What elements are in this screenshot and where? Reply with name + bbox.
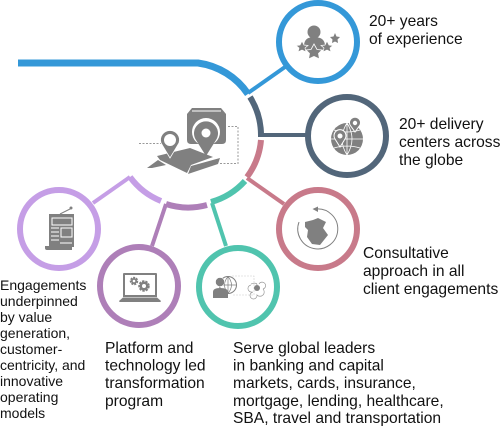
text: consultative approach: Consultative xyxy=(363,245,449,262)
text: global leaders: Serve global leaders xyxy=(233,340,375,357)
text: delivery centers: centers across xyxy=(399,134,500,151)
text: engagements: customer- xyxy=(0,341,63,357)
blue timeline arc and connector xyxy=(18,3,357,94)
purple arc and connector xyxy=(100,204,207,325)
text: global leaders: markets, cards, insurance, xyxy=(233,375,416,392)
teal arc and connector xyxy=(199,181,277,326)
text: platform program: technology led xyxy=(105,358,206,374)
text: engagements: generation, xyxy=(0,325,70,341)
text: consultative approach: client engagements xyxy=(363,281,498,298)
text: global leaders: mortgage, lending, healthcare, xyxy=(233,393,444,410)
text: global leaders: in banking and capital xyxy=(233,358,384,374)
lilac arc and connector xyxy=(20,177,161,268)
text: platform program: program xyxy=(105,393,163,410)
text: delivery centers: 20+ delivery xyxy=(399,116,484,133)
text: engagements: innovative xyxy=(0,373,63,389)
text: engagements: Engagements xyxy=(0,277,86,293)
text: engagements: by value xyxy=(0,309,52,325)
pink arc and connector xyxy=(247,140,357,268)
text: engagements: operating xyxy=(0,389,58,405)
text: delivery centers: the globe xyxy=(399,152,463,169)
text: years of experience: of experience xyxy=(369,31,463,48)
icon: laptop with gears xyxy=(119,273,161,302)
icon: person with stars xyxy=(296,26,340,59)
text: engagements: centricity, and xyxy=(0,357,85,373)
icon: central map with pins and box xyxy=(139,108,238,174)
icon: globe with location pins xyxy=(331,117,363,155)
icon: document with device xyxy=(45,206,74,250)
text: years of experience: 20+ years xyxy=(369,13,438,30)
text: engagements: models xyxy=(0,405,45,421)
text: consultative approach: approach in all xyxy=(363,263,464,280)
icon: handshake with circular arrow xyxy=(298,206,338,249)
dark slate arc and connector xyxy=(250,97,386,175)
text: platform program: transformation xyxy=(105,375,205,392)
icon: global leader network xyxy=(213,276,266,299)
text: engagements: underpinned xyxy=(0,293,78,309)
text: platform program: Platform and xyxy=(105,340,193,357)
